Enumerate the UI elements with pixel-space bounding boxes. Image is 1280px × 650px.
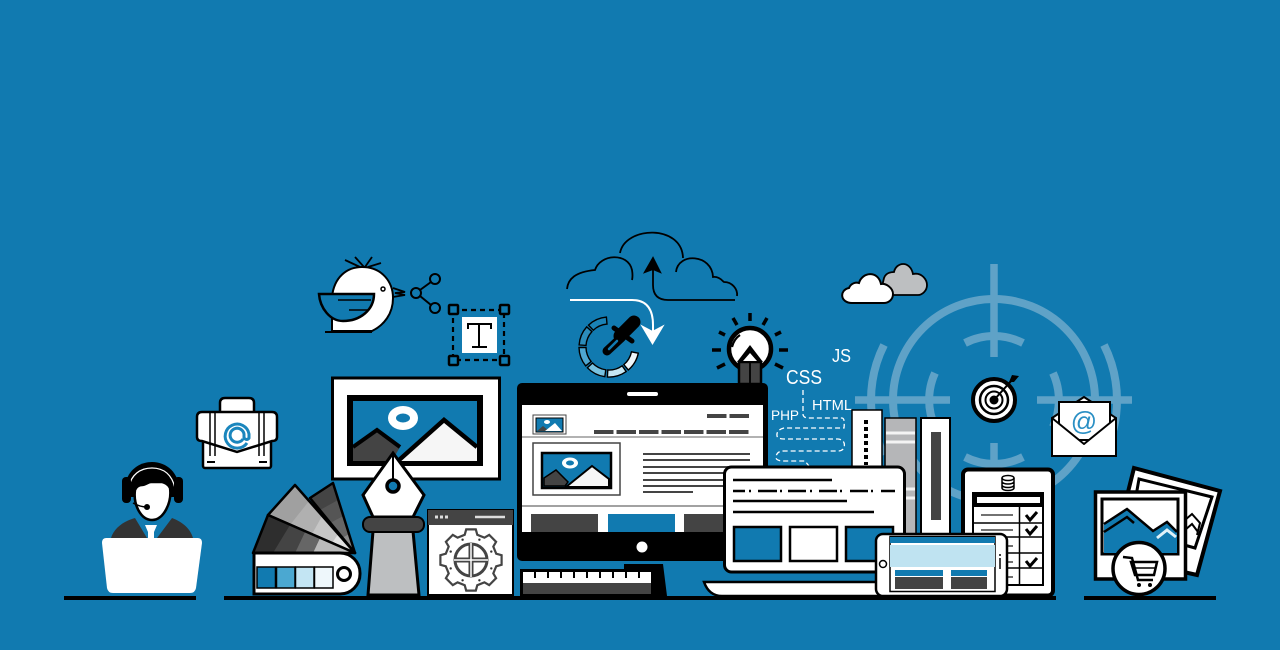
laptop: [102, 538, 202, 593]
icon: text tool: [449, 305, 509, 365]
icon: bullseye with dart: [973, 375, 1019, 421]
code labels with dashed path: HTML: [812, 397, 852, 414]
icon: email envelope: [1052, 397, 1116, 456]
header logo: [533, 415, 566, 434]
background target crosshair: [855, 264, 1132, 501]
laptop with wireframe: [704, 467, 904, 596]
code labels with dashed path: [771, 346, 852, 466]
icon: bird with share: [319, 257, 440, 332]
colour swatch fan: [253, 483, 360, 594]
footer blocks: [531, 514, 598, 532]
text lines: [643, 454, 750, 486]
icon: light bulb with pencil: [712, 313, 788, 384]
gear: [440, 529, 502, 591]
cloud outline with upload arrow: [567, 233, 737, 300]
ruler: [520, 564, 667, 596]
icon: colour picker dropper: [579, 317, 638, 377]
database tablet: [963, 470, 1053, 596]
ground lines: [64, 596, 1216, 600]
code labels with dashed path: PHP: [771, 407, 799, 423]
framed landscape picture: [332, 378, 500, 479]
photo stack with shopping cart: [1096, 468, 1220, 594]
content picture: [533, 443, 620, 495]
icon: email briefcase: [197, 398, 277, 468]
icon: shopping cart: [1123, 557, 1157, 586]
desktop monitor: [517, 383, 768, 561]
icon: email envelope: @: [1071, 406, 1097, 436]
code labels with dashed path: JS: [832, 346, 851, 366]
landscape picture: [1102, 499, 1178, 554]
books: [852, 410, 950, 548]
settings window: [428, 510, 513, 595]
pen nib tool: [363, 453, 424, 595]
white curved arrow: [570, 300, 662, 343]
nav bars: [594, 416, 749, 432]
phone landscape: [876, 534, 1007, 596]
support agent: [102, 462, 202, 593]
code labels with dashed path: CSS: [786, 367, 822, 389]
white cloud with grey cloud: [842, 264, 927, 303]
